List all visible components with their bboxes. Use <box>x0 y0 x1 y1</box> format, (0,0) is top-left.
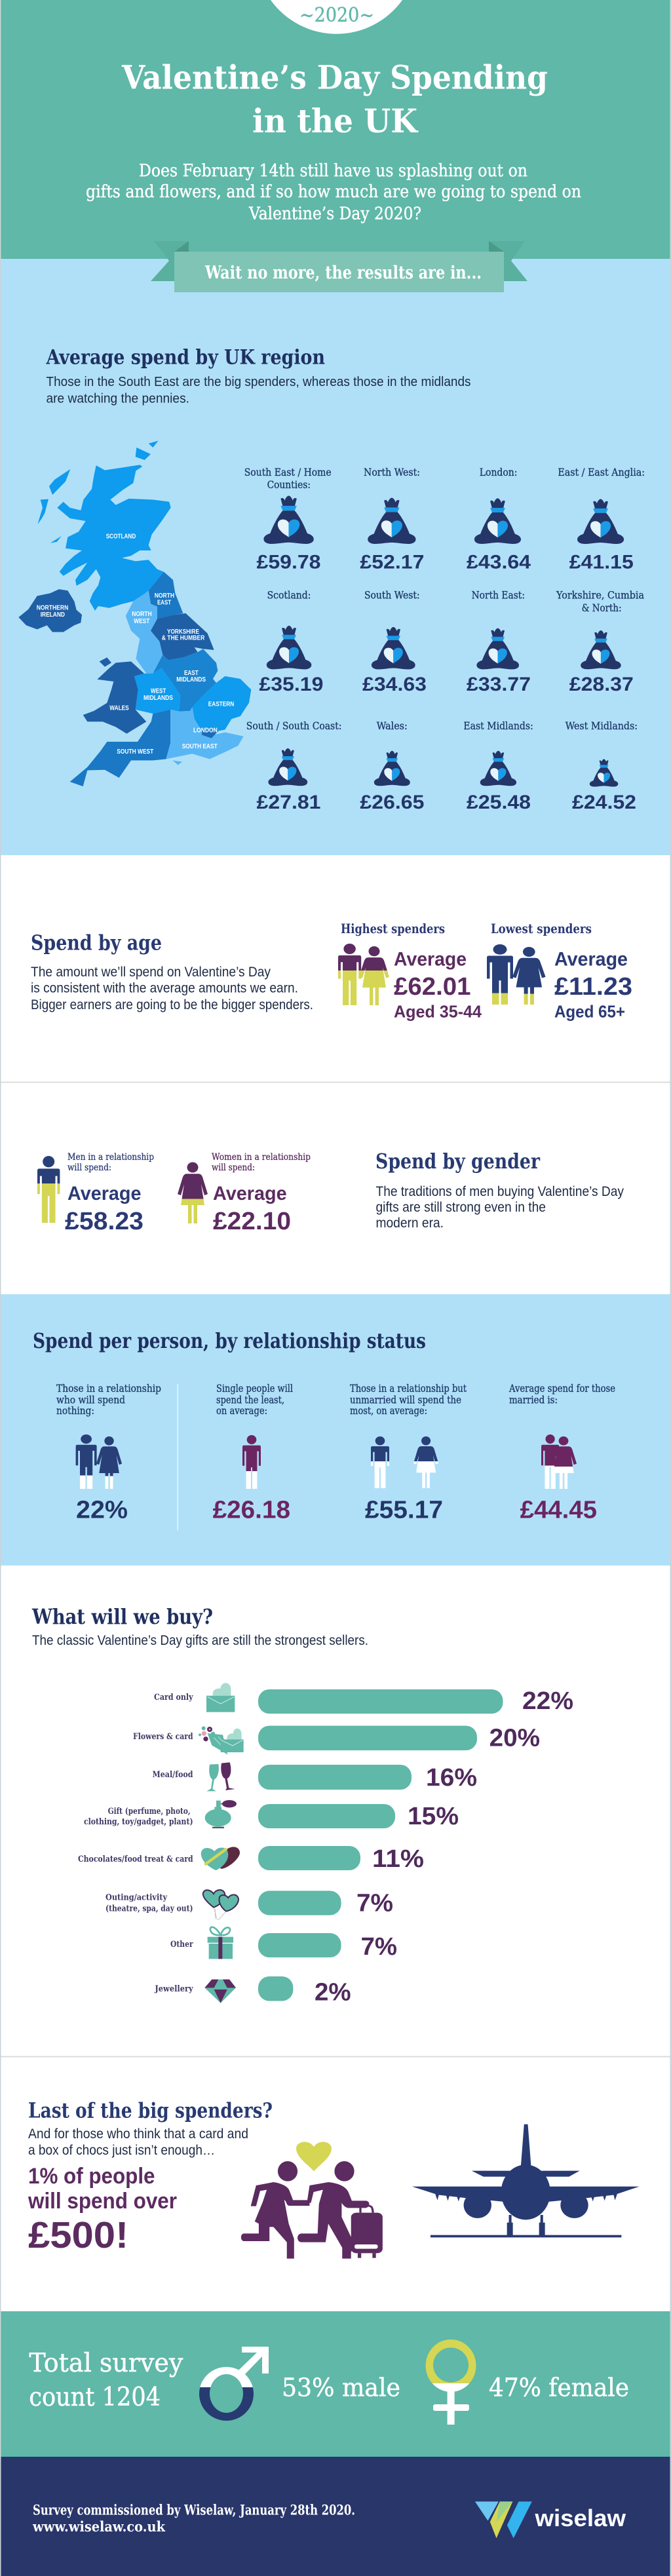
bar values: 11% <box>372 1845 424 1873</box>
region values: £26.65 <box>360 792 424 813</box>
year badge: ~2020~ <box>299 4 374 27</box>
title <box>121 58 548 140</box>
bar values: 20% <box>489 1725 540 1752</box>
region labels <box>244 466 645 732</box>
bar values: 15% <box>408 1803 459 1830</box>
map of the UK: MIDLANDS <box>144 695 173 702</box>
icon: perfume bottle <box>205 1800 237 1828</box>
description: gender: modern era. <box>376 1216 444 1231</box>
highest spenders: Average <box>394 948 467 970</box>
map of the UK: IRELAND <box>41 611 65 619</box>
column: unmarried: Those in a relationship but <box>350 1383 467 1394</box>
chart labels: Outing/activity <box>105 1893 167 1903</box>
column: single people: on average: <box>216 1405 267 1417</box>
column: single people <box>213 1383 293 1524</box>
description: region: Those in the South East are the big spenders, whereas those in the midlands <box>46 375 470 389</box>
chart labels: Flowers & card <box>133 1732 193 1742</box>
panel: UK region spend <box>0 241 671 855</box>
icon: chocolates <box>201 1847 240 1870</box>
icon: couple <box>76 1434 122 1489</box>
male share: 53% male <box>282 2374 400 2402</box>
bar values: 2% <box>315 1979 351 2007</box>
women in a relationship: Women in a relationship <box>212 1152 311 1163</box>
total survey count <box>29 2349 183 2412</box>
region values: £35.19 <box>259 674 323 695</box>
region labels: North East: <box>472 588 525 601</box>
women in a relationship <box>178 1152 311 1235</box>
region grid: bags, labels and values <box>244 466 645 813</box>
men in a relationship: will spend: <box>67 1163 111 1173</box>
icon: single person <box>242 1435 261 1489</box>
lowest spenders: Average <box>554 948 628 970</box>
highest spenders <box>338 921 482 1021</box>
ribbon banner <box>151 241 527 292</box>
region values <box>257 552 636 813</box>
year badge <box>271 0 402 34</box>
column: married: £44.45 <box>520 1497 597 1524</box>
region labels: London: <box>480 466 517 478</box>
chart labels <box>78 1693 193 1994</box>
intro text: gifts and flowers, and if so how much are we going to spend on <box>86 182 581 202</box>
lowest spenders: Aged 65+ <box>554 1001 625 1021</box>
description: big spenders: And for those who think that a card and <box>28 2126 248 2142</box>
region labels: North West: <box>364 466 420 478</box>
region labels: Yorkshire, Cumbia <box>556 588 644 601</box>
description: age: is consistent with the average amounts we earn. <box>31 981 298 996</box>
map of the UK: EAST <box>184 670 199 677</box>
chart labels: Jewellery <box>155 1984 193 1994</box>
map of the UK: SOUTH WEST <box>117 748 153 756</box>
women in a relationship: will spend: <box>212 1163 255 1173</box>
icon: card <box>206 1683 235 1712</box>
column: spend nothing: nothing: <box>56 1405 94 1417</box>
description: age: Bigger earners are going to be the bigger spenders. <box>31 997 313 1012</box>
map of the UK: NORTHERN <box>37 605 68 612</box>
column: spend nothing: Those in a relationship <box>56 1383 161 1394</box>
men in a relationship: Average <box>67 1183 142 1204</box>
region values: £41.15 <box>569 552 634 573</box>
icon: unmarried pair <box>371 1436 438 1488</box>
map of the UK: SOUTH EAST <box>182 743 218 750</box>
map of the UK: WALES <box>109 705 129 712</box>
heading: big spenders: Last of the big spenders? <box>28 2098 273 2123</box>
heading: relationship status: Spend per person, by relationship status <box>33 1328 426 1353</box>
callout: 1% spend over £500: £500! <box>28 2214 128 2256</box>
column: single people: £26.18 <box>213 1497 290 1524</box>
bar values <box>315 1687 573 2007</box>
callout: 1% spend over £500 <box>28 2164 177 2256</box>
panel: last of the big spenders <box>0 2058 671 2311</box>
map of the UK: WEST <box>134 618 149 625</box>
panel: header <box>0 0 671 259</box>
panel: survey count <box>0 2311 671 2457</box>
chart labels: Meal/food <box>152 1770 193 1780</box>
icon: female symbol <box>426 2339 476 2425</box>
region labels: Counties: <box>267 478 311 491</box>
chart labels: Gift (perfume, photo, <box>108 1807 191 1817</box>
map of the UK <box>18 441 251 786</box>
map of the UK: EASTERN <box>208 701 234 708</box>
region labels: Scotland: <box>267 588 311 601</box>
ribbon banner: Wait no more, the results are in... <box>204 263 482 283</box>
heading: what will we buy: What will we buy? <box>31 1604 213 1629</box>
column: spend nothing <box>56 1383 161 1524</box>
icon: running couple with suitcase <box>241 2142 383 2259</box>
panel: spend by gender <box>0 1083 671 1294</box>
region values: £33.77 <box>467 674 531 695</box>
panel: what will we buy <box>0 1566 671 2056</box>
panel: spend by age <box>0 855 671 1082</box>
icon: diamond <box>204 1980 236 2003</box>
description: gender <box>376 1184 624 1231</box>
icons: gift types <box>199 1683 244 2003</box>
column: married <box>508 1383 615 1524</box>
description: age: The amount we’ll spend on Valentine’s Day <box>31 965 271 980</box>
map of the UK: WEST <box>151 688 166 695</box>
money bag icons <box>263 495 624 786</box>
icon: woman <box>178 1163 208 1223</box>
title: Valentine’s Day Spending <box>121 58 548 97</box>
title: in the UK <box>252 102 418 140</box>
region labels: South East / Home <box>244 466 332 478</box>
map of the UK: EAST <box>157 599 171 606</box>
description: age <box>31 965 313 1012</box>
description: region: are watching the pennies. <box>46 392 189 406</box>
description: gifts: The classic Valentine’s Day gifts are still the strongest sellers. <box>32 1633 368 1648</box>
lowest spenders: Lowest spenders <box>491 921 592 936</box>
total survey count: count 1204 <box>29 2383 161 2412</box>
lowest spenders <box>487 921 632 1021</box>
column: single people: spend the least, <box>216 1394 284 1406</box>
column: unmarried: £55.17 <box>365 1497 443 1524</box>
region labels: West Midlands: <box>566 720 638 732</box>
chart labels: Other <box>170 1940 193 1950</box>
icon: lowest spender couple <box>487 944 546 1005</box>
bar values: 22% <box>522 1687 573 1715</box>
column: spend nothing: who will spend <box>56 1394 125 1406</box>
callout: 1% spend over £500: will spend over <box>28 2189 177 2214</box>
intro text <box>86 161 581 224</box>
men in a relationship: £58.23 <box>65 1208 144 1235</box>
men in a relationship: Men in a relationship <box>67 1152 154 1163</box>
icon: man <box>37 1156 60 1223</box>
region values: £52.17 <box>360 552 424 573</box>
icon: highest spender couple <box>338 944 389 1005</box>
description: gender: gifts are still strong even in the <box>376 1200 546 1215</box>
region labels: South West: <box>364 588 420 601</box>
description: gender: The traditions of men buying Valentine’s Day <box>376 1184 624 1199</box>
region labels: South / South Coast: <box>246 720 342 732</box>
region labels: East / East Anglia: <box>558 466 645 478</box>
highest spenders: Highest spenders <box>341 921 445 936</box>
column: married: married is: <box>509 1394 558 1406</box>
callout: 1% spend over £500: 1% of people <box>28 2164 155 2189</box>
description: big spenders: a box of chocs just isn’t enough… <box>28 2143 215 2158</box>
column: single people: Single people will <box>216 1383 293 1394</box>
bar values: 7% <box>356 1890 393 1917</box>
region values: £27.81 <box>257 792 321 813</box>
icon: married couple <box>541 1434 577 1489</box>
column: unmarried: unmarried will spend the <box>350 1394 461 1406</box>
chart labels: Chocolates/food treat & card <box>78 1855 193 1864</box>
column: unmarried <box>350 1383 467 1524</box>
icon: gift box <box>208 1927 233 1959</box>
female share: 47% female <box>489 2374 629 2402</box>
men in a relationship <box>37 1152 154 1235</box>
intro text: Does February 14th still have us splashing out on <box>139 161 527 181</box>
region labels: East Midlands: <box>463 720 533 732</box>
region values: £25.48 <box>467 792 531 813</box>
region values: £59.78 <box>257 552 321 573</box>
women in a relationship: £22.10 <box>213 1208 291 1235</box>
map of the UK: YORKSHIRE <box>167 628 199 636</box>
highest spenders: Aged 35-44 <box>394 1001 482 1021</box>
chart labels: Card only <box>154 1693 193 1702</box>
region labels: Wales: <box>377 720 408 732</box>
icon: wine glasses <box>206 1762 235 1791</box>
logo: wiselaw <box>475 2501 626 2538</box>
heading: spend by age: Spend by age <box>31 930 162 955</box>
highest spenders: £62.01 <box>394 973 470 1001</box>
icon: aeroplane <box>412 2124 640 2237</box>
icon: male symbol <box>199 2347 269 2421</box>
map of the UK: LONDON <box>193 727 218 735</box>
column: married: Average spend for those <box>508 1383 615 1394</box>
footer text: www.wiselaw.co.uk <box>32 2518 165 2535</box>
footer text <box>32 2502 355 2535</box>
lowest spenders: £11.23 <box>554 973 632 1001</box>
chart labels: (theatre, spa, day out) <box>105 1904 193 1914</box>
map of the UK: NORTH <box>155 592 174 600</box>
heading: average spend by region: Average spend by UK region <box>46 346 325 370</box>
icon: balloons <box>203 1890 239 1920</box>
icon: flowers and card <box>199 1726 244 1754</box>
logo: wiselaw: wiselaw <box>534 2505 626 2531</box>
map of the UK: SCOTLAND <box>106 533 136 541</box>
bar chart <box>258 1689 503 2001</box>
map of the UK: & THE HUMBER <box>162 635 205 642</box>
panel: spend by relationship status <box>0 1294 671 1566</box>
panel: footer <box>0 2457 671 2576</box>
chart labels: clothing, toy/gadget, plant) <box>84 1817 193 1827</box>
map of the UK: NORTH <box>132 611 152 618</box>
column: spend nothing: 22% <box>76 1497 128 1524</box>
total survey count: Total survey <box>29 2349 183 2378</box>
region values: £24.52 <box>572 792 636 813</box>
footer text: Survey commissioned by Wiselaw, January 28th 2020. <box>33 2502 355 2518</box>
description: region <box>46 375 470 406</box>
map of the UK: MIDLANDS <box>176 676 206 683</box>
region values: £28.37 <box>569 674 634 695</box>
intro text: Valentine’s Day 2020? <box>248 204 421 224</box>
column: unmarried: most, on average: <box>350 1405 427 1417</box>
heading: spend by gender: Spend by gender <box>375 1149 541 1174</box>
bar values: 16% <box>426 1764 477 1792</box>
region values: £43.64 <box>467 552 531 573</box>
women in a relationship: Average <box>213 1183 287 1204</box>
description: big spenders <box>28 2126 248 2158</box>
region values: £34.63 <box>362 674 427 695</box>
bar values: 7% <box>361 1933 397 1961</box>
region labels: & North: <box>582 602 622 614</box>
